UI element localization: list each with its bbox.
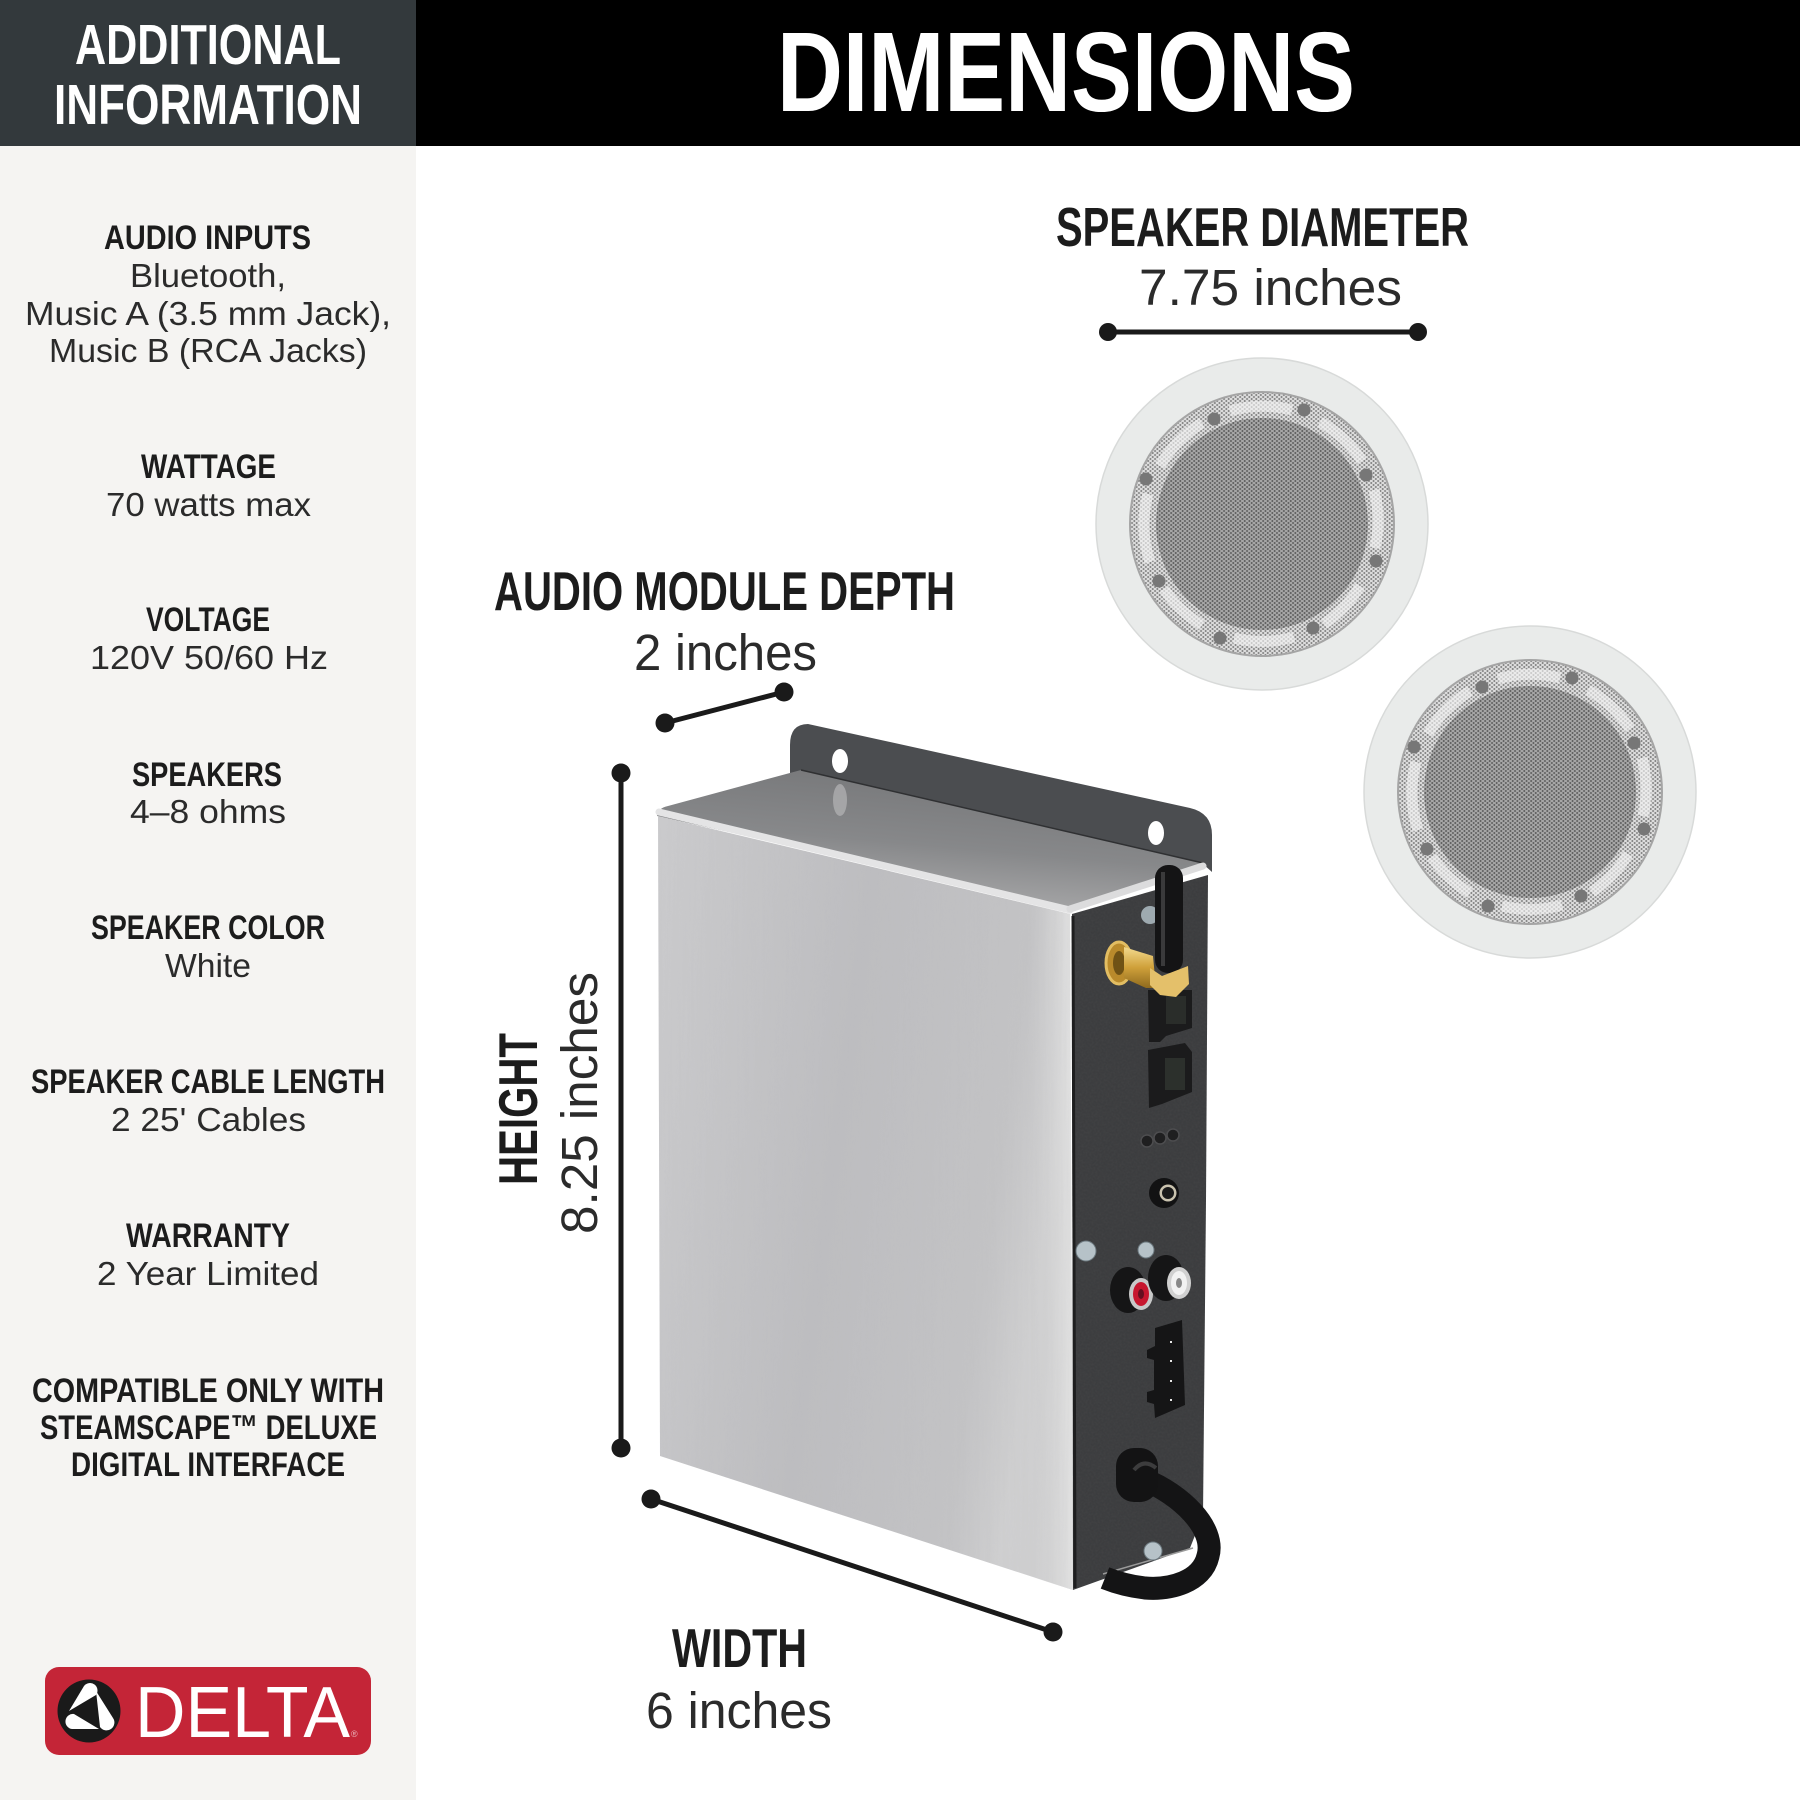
label: width: WIDTH — [672, 1617, 807, 1679]
label: height: 8.25 inches — [551, 972, 608, 1234]
speaker 2 — [1364, 626, 1696, 958]
spec: compatibility note — [32, 1372, 384, 1484]
connector port 2 — [1148, 1043, 1192, 1108]
spec: compatibility note: COMPATIBLE ONLY WITH — [32, 1372, 384, 1410]
spec: warranty — [97, 1217, 319, 1292]
spec: speakers — [130, 756, 286, 830]
dimension line: depth — [656, 682, 794, 732]
title band: dimensions — [416, 0, 1800, 146]
side panel — [1072, 875, 1208, 1590]
sidebar header band: ADDITIONAL — [75, 13, 341, 77]
spec: speaker color: SPEAKER COLOR — [91, 909, 325, 947]
spec: audio inputs: Music A (3.5 mm Jack), — [25, 295, 391, 332]
rca jacks — [1110, 1255, 1191, 1313]
label: speaker diameter: 7.75 inches — [1139, 259, 1402, 316]
spec: audio inputs: Bluetooth, — [130, 257, 286, 294]
spec: audio inputs — [25, 219, 391, 369]
spec: speaker color — [91, 909, 325, 984]
audio module device — [657, 724, 1212, 1590]
spec: speakers: 4–8 ohms — [130, 793, 286, 830]
title band: dimensions: DIMENSIONS — [777, 9, 1355, 135]
power cable — [1105, 1448, 1209, 1588]
label: height: HEIGHT — [487, 1033, 549, 1185]
box top surface — [657, 770, 1203, 908]
logo: delta — [45, 1667, 371, 1755]
panel screws — [1076, 1241, 1162, 1560]
spec: compatibility note: STEAMSCAPE™ DELUXE — [40, 1409, 377, 1447]
spec: speaker cable length: SPEAKER CABLE LENGTH — [31, 1063, 385, 1101]
label: width — [646, 1617, 832, 1739]
front stainless face — [658, 812, 1203, 1590]
logo: delta: ® — [351, 1729, 358, 1739]
spec: wattage: 70 watts max — [106, 486, 312, 523]
spec: speaker cable length: 2 25' Cables — [111, 1101, 306, 1138]
dimension line: width — [642, 1490, 1062, 1642]
spec: audio inputs: Music B (RCA Jacks) — [49, 332, 367, 369]
spec: voltage — [90, 601, 328, 676]
connector port 1 — [1148, 990, 1192, 1042]
spec: voltage: VOLTAGE — [146, 601, 270, 639]
sidebar header band: INFORMATION — [54, 73, 362, 137]
label: speaker diameter: SPEAKER DIAMETER — [1056, 196, 1469, 258]
four pin connector — [1147, 1320, 1185, 1418]
spec: warranty: 2 Year Limited — [97, 1255, 319, 1292]
sidebar background — [0, 146, 416, 1800]
label: audio module depth: 2 inches — [634, 624, 817, 681]
label: height — [487, 972, 608, 1234]
label: audio module depth — [494, 560, 955, 681]
spec: audio inputs: AUDIO INPUTS — [104, 219, 311, 257]
spec: speaker color: White — [165, 947, 251, 984]
logo: delta: DELTA — [135, 1673, 350, 1753]
spec: wattage — [106, 448, 312, 523]
indicator buttons — [1141, 1129, 1179, 1147]
sidebar header band — [0, 0, 416, 146]
3.5 mm jack — [1149, 1178, 1179, 1208]
label: speaker diameter — [1056, 196, 1469, 316]
dimension line: speaker diameter — [1099, 323, 1427, 341]
dimension line: height — [612, 764, 630, 1458]
label: width: 6 inches — [646, 1682, 832, 1739]
mounting flange — [790, 724, 1212, 872]
antenna — [1106, 865, 1189, 997]
spec: speaker cable length — [31, 1063, 385, 1138]
spec: warranty: WARRANTY — [126, 1217, 290, 1255]
label: audio module depth: AUDIO MODULE DEPTH — [494, 560, 955, 622]
spec: voltage: 120V 50/60 Hz — [90, 639, 328, 676]
spec: speakers: SPEAKERS — [132, 756, 282, 794]
spec: compatibility note: DIGITAL INTERFACE — [71, 1446, 345, 1484]
speaker 1 — [1096, 358, 1428, 690]
top screw — [1141, 906, 1159, 924]
spec: wattage: WATTAGE — [141, 448, 276, 486]
